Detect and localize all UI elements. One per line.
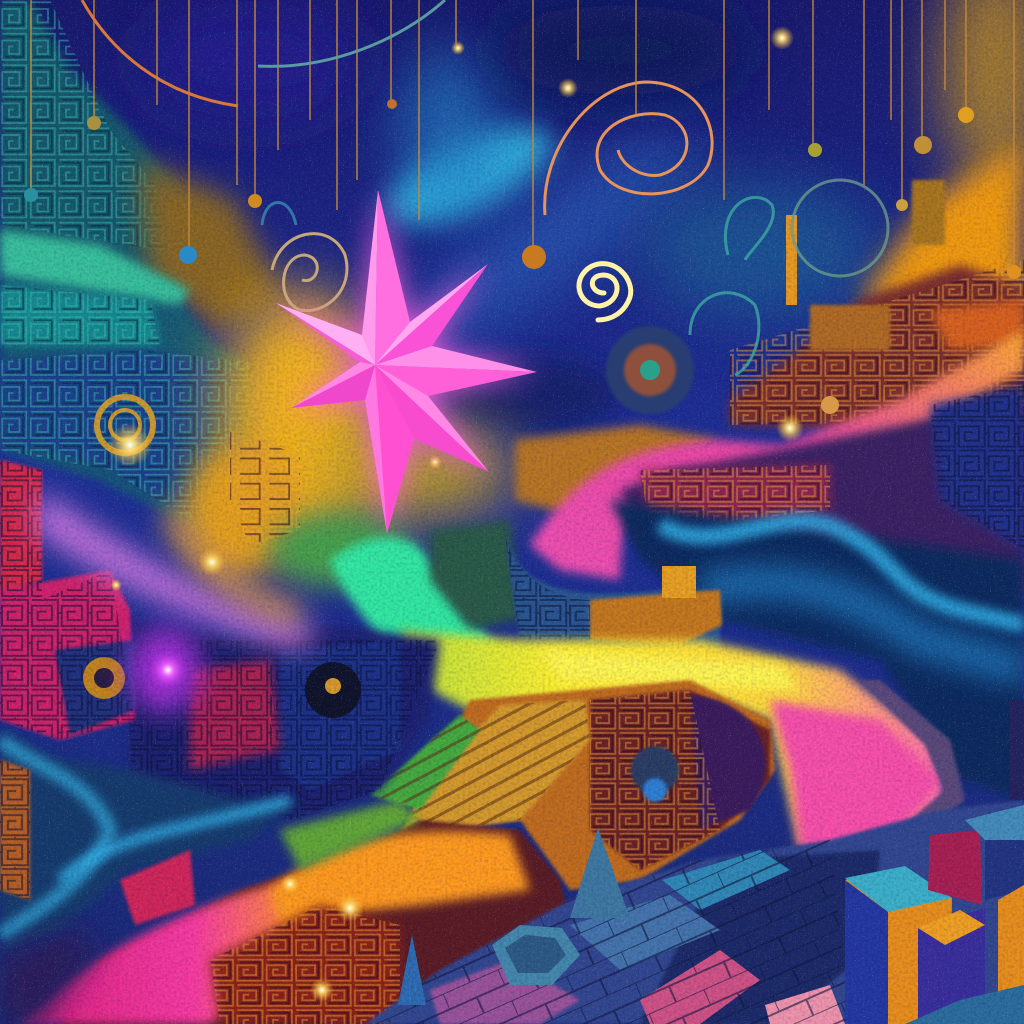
- decoration: mandala flower: [606, 326, 694, 414]
- decoration: hanging orb beads: [24, 99, 1021, 279]
- region: teal labyrinth cliffs, upper left: [0, 0, 285, 530]
- region: magenta-pink blocks, left: [0, 460, 135, 740]
- star glow: [276, 190, 537, 534]
- region: yellow central road: [400, 630, 965, 870]
- region: golden sunset hill, upper right: [730, 0, 1024, 430]
- decoration: orange arcs at top: [82, 0, 445, 106]
- region: canyon with steps: [370, 680, 775, 890]
- region: large foreground towers: [845, 700, 1024, 1024]
- decoration: hanging threads: [31, 0, 1014, 265]
- region: rainbow road, lower left: [0, 800, 570, 1024]
- nebula: cyan milky way: [140, 0, 880, 433]
- region: central tiered wall: [505, 535, 722, 650]
- region: blue river on right: [610, 500, 1024, 800]
- region: isometric tiled plaza, bottom right: [365, 800, 1024, 1024]
- decoration: pale spiral near star: [272, 234, 347, 311]
- region: green path under star: [330, 520, 520, 650]
- region: dark blue labyrinth blocks, left centre: [130, 620, 440, 820]
- region: pink and purple nebula stream, left: [35, 490, 320, 712]
- decoration: glowing white spiral: [579, 264, 631, 320]
- icon: small pine tree, lower centre: [398, 935, 426, 1005]
- region: blue river, lower left: [0, 730, 300, 950]
- icon: blue pine tree in canyon: [570, 828, 630, 918]
- icon: pink seven-pointed star: [276, 190, 537, 534]
- decoration: faint teal rings and dial, right sky: [262, 180, 888, 375]
- decoration: gold spiral, upper centre: [545, 82, 712, 215]
- light: glowing orbs and sparks: [108, 26, 839, 1002]
- glow: yellow light behind star: [185, 290, 515, 586]
- region: central mesa and rainbow upper path: [515, 330, 1024, 590]
